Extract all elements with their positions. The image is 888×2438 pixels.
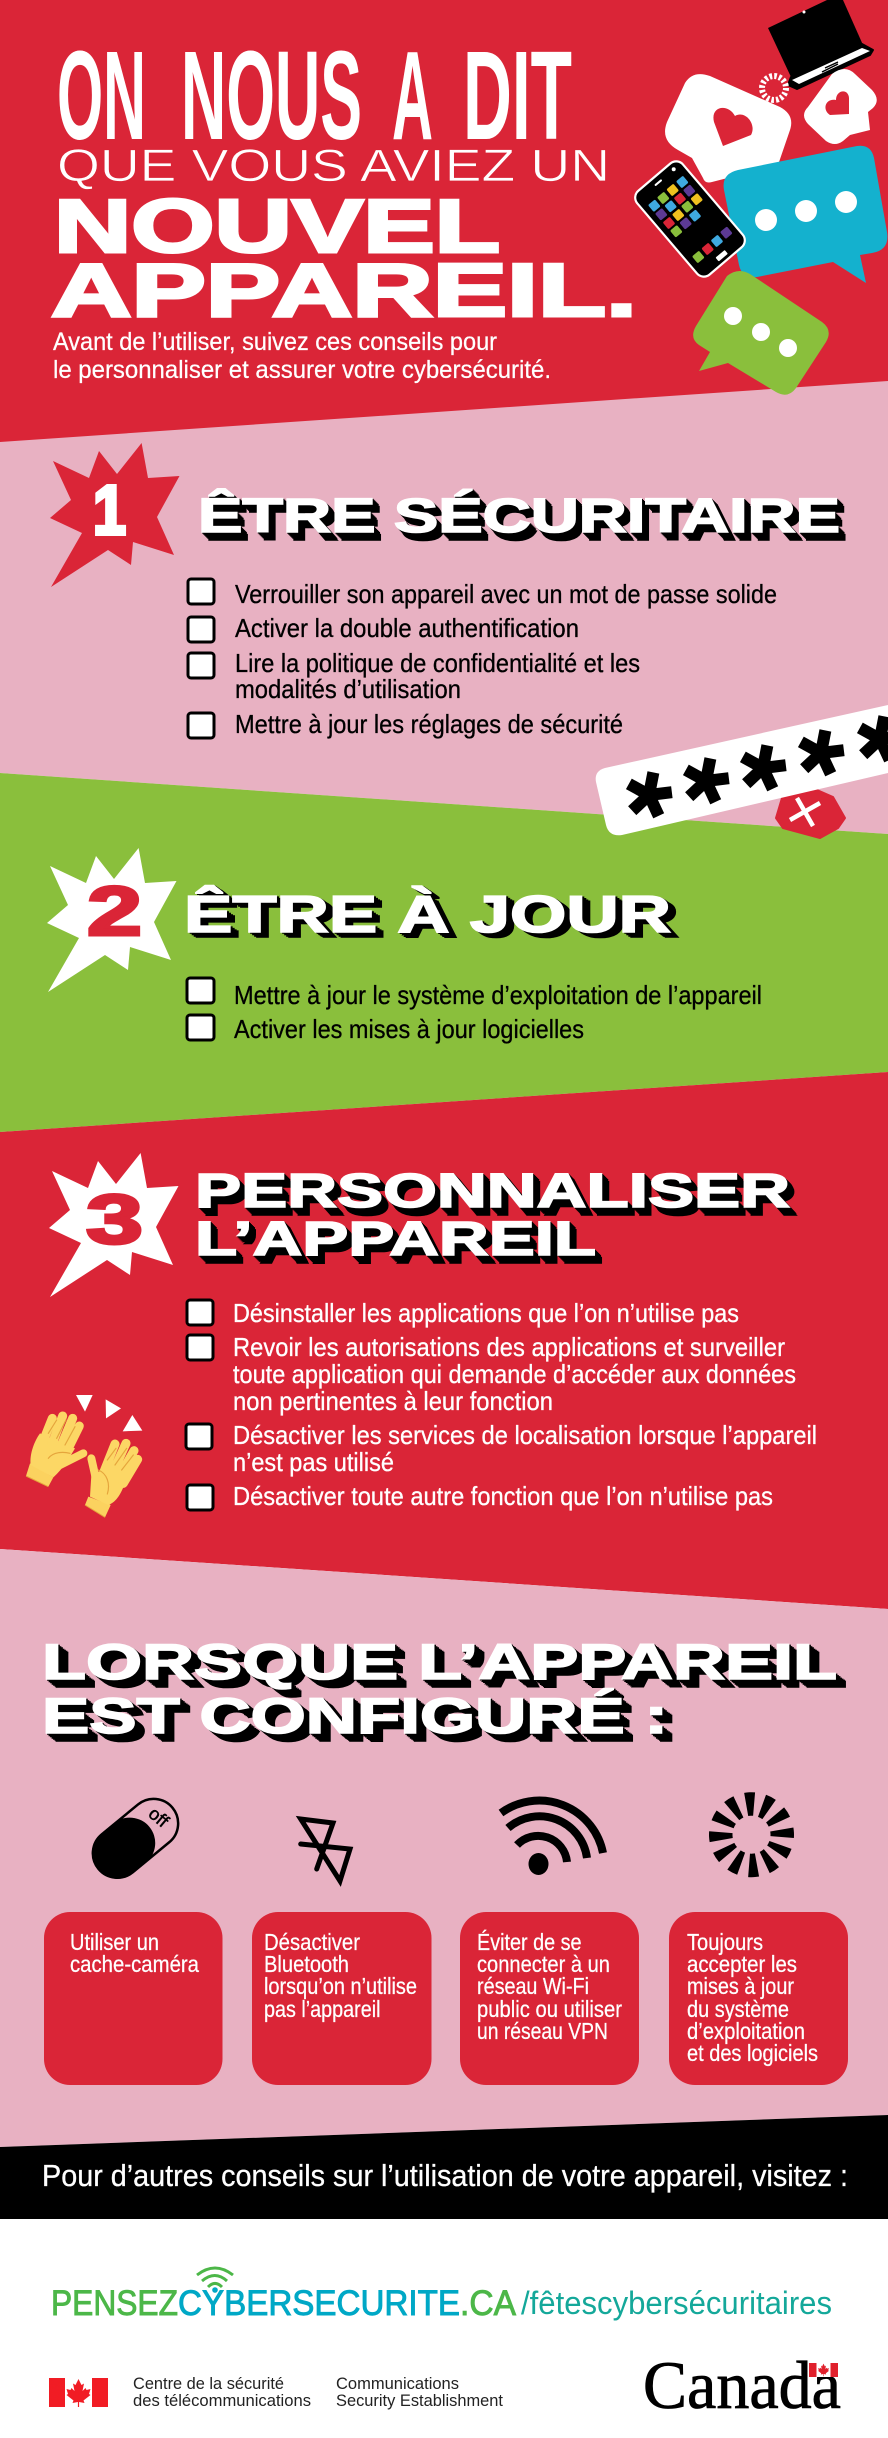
card: wifi: un réseau VPN	[477, 2018, 608, 2044]
number 2: 2	[87, 872, 142, 950]
checklist: Lire la politique de confidentialité et les	[235, 648, 640, 678]
checklist: Désactiver toute autre fonction que l’on n’utilise pas	[233, 1481, 773, 1511]
checklist: n’est pas utilisé	[233, 1447, 394, 1477]
checklist	[186, 1298, 817, 1511]
checklist: Revoir les autorisations des applications et surveiller	[233, 1332, 785, 1362]
icon: blue speech bubble	[724, 146, 887, 283]
icon: raised hands	[26, 1395, 142, 1517]
agency name: Security Establishment	[336, 2391, 503, 2410]
title: NOUVEL	[54, 184, 500, 268]
panel: lorsque l'appareil est configuré	[42, 1634, 848, 2085]
icon: large heart bubble	[665, 74, 791, 182]
logo: canadian flag	[49, 2378, 108, 2407]
card: wifi: Éviter de se	[477, 1929, 582, 1955]
subtitle	[53, 328, 551, 384]
panel: header	[51, 0, 887, 395]
title: APPAREIL.	[51, 248, 637, 332]
card: bluetooth: lorsqu’on n’utilise	[264, 1973, 417, 1999]
heading: LORSQUE L’APPAREIL	[42, 1634, 837, 1690]
starburst 1	[50, 443, 180, 587]
icon: camera cover	[81, 1788, 189, 1889]
icon: wifi signal	[197, 2268, 233, 2293]
subtitle: le personnaliser et assurer votre cybersécurité.	[53, 356, 551, 384]
checklist: non pertinentes à leur fonction	[233, 1386, 553, 1416]
card: camera cover: cache-caméra	[70, 1951, 199, 1977]
card: wifi: public ou utiliser	[477, 1996, 622, 2022]
checklist: toute application qui demande d’accéder aux données	[233, 1359, 796, 1389]
icon: laptop	[768, 0, 873, 89]
starburst 2	[47, 848, 176, 992]
card: bluetooth: pas l’appareil	[264, 1996, 380, 2022]
card: bluetooth	[252, 1912, 432, 2085]
title: DIT	[463, 25, 572, 166]
card: updates: et des logiciels	[687, 2040, 818, 2066]
card: camera cover: Utiliser un	[70, 1929, 159, 1955]
heading: ÊTRE À JOUR	[184, 885, 671, 944]
panel: personnaliser l'appareil	[26, 1153, 817, 1517]
number 1: 1	[93, 471, 126, 549]
checklist: Verrouiller son appareil avec un mot de passe solide	[235, 579, 777, 609]
logo: pensez cybersecurite: /fêtescybersécuritaires	[521, 2285, 832, 2321]
checklist: Désinstaller les applications que l’on n’utilise pas	[233, 1298, 739, 1328]
icon: loading ring	[762, 76, 786, 100]
card: updates: mises à jour	[687, 1973, 794, 1999]
card: wifi: connecter à un	[477, 1951, 610, 1977]
card: updates: d’exploitation	[687, 2018, 805, 2044]
agency name	[133, 2374, 503, 2410]
title: ON	[57, 25, 146, 166]
logo: canada wordmark: Canada	[643, 2347, 841, 2423]
title: QUE VOUS AVIEZ UN	[57, 140, 610, 191]
logo: pensez cybersecurite: .CA	[460, 2284, 517, 2323]
agency name: Centre de la sécurité	[133, 2374, 284, 2393]
checklist	[188, 579, 777, 739]
panel: être à jour	[47, 848, 762, 1044]
card: wifi	[460, 1912, 639, 2085]
panel: être sécuritaire	[50, 443, 888, 838]
agency name: des télécommunications	[133, 2391, 311, 2410]
checklist	[187, 978, 762, 1044]
heading: EST CONFIGURÉ :	[42, 1688, 668, 1744]
checklist: Mettre à jour le système d’exploitation de l’appareil	[234, 980, 762, 1010]
card: updates: du système	[687, 1996, 789, 2022]
heading	[195, 1165, 790, 1266]
icon: wifi	[501, 1801, 603, 1875]
subtitle: Avant de l’utiliser, suivez ces conseils pour	[53, 328, 497, 356]
icon: rejected password	[596, 705, 888, 838]
checklist: Désactiver les services de localisation lorsque l’appareil	[233, 1420, 817, 1450]
title: NOUS	[181, 25, 362, 166]
card: updates: accepter les	[687, 1951, 797, 1977]
heading: PERSONNALISER	[195, 1165, 790, 1218]
number 3: 3	[86, 1180, 143, 1258]
title	[51, 25, 637, 332]
heading	[42, 1634, 837, 1744]
heading: L’APPAREIL	[195, 1213, 596, 1266]
starburst 3	[49, 1153, 178, 1297]
card: bluetooth: Bluetooth	[264, 1951, 349, 1977]
icon: loading ring	[719, 1802, 784, 1867]
icon: green speech bubble	[693, 271, 829, 395]
agency name: Communications	[336, 2374, 459, 2393]
call to action: Pour d’autres conseils sur l’utilisation de votre appareil, visitez :	[42, 2158, 848, 2193]
icon: bluetooth off	[301, 1819, 350, 1881]
card: wifi: réseau Wi-Fi	[477, 1973, 589, 1999]
logo: pensez cybersecurite: CYBERSECURITE	[178, 2284, 460, 2323]
title: A	[392, 25, 433, 166]
checklist: Activer les mises à jour logicielles	[234, 1014, 584, 1044]
heading: ÊTRE SÉCURITAIRE	[198, 488, 840, 543]
card: updates: Toujours	[687, 1929, 763, 1955]
logo: pensez cybersecurite	[51, 2268, 832, 2323]
checklist: modalités d’utilisation	[235, 674, 461, 704]
checklist: Mettre à jour les réglages de sécurité	[235, 709, 623, 739]
logo: pensez cybersecurite: PENSEZ	[51, 2284, 178, 2323]
card: updates	[669, 1912, 848, 2085]
checklist: Activer la double authentification	[235, 613, 579, 643]
icon: small heart bubble	[804, 69, 877, 144]
card: bluetooth: Désactiver	[264, 1929, 360, 1955]
icon: smartphone	[632, 158, 748, 280]
icon: camera cover: off	[145, 1803, 173, 1832]
card: camera cover	[44, 1912, 222, 2085]
